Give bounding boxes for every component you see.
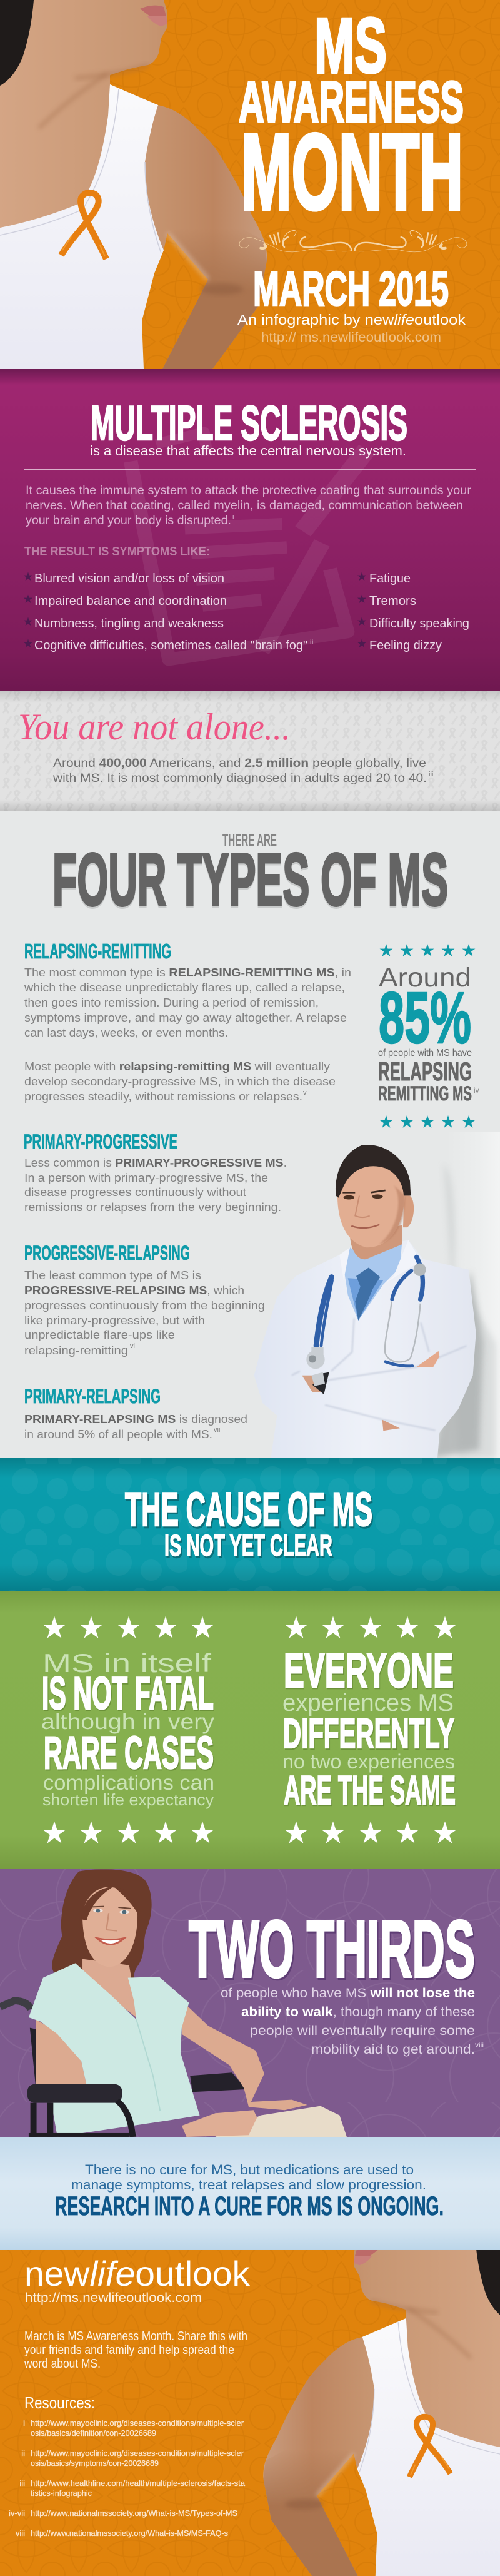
block: relapsing-remitting: develop secondary-progressive MS, in which the disease — [24, 1075, 336, 1088]
intro paragraph: nerves. When that coating, called myelin, is damaged, communication between — [26, 499, 463, 512]
symptoms list: left column: Blurred vision and/or loss of vision — [34, 572, 224, 586]
resources list: tistics-infographic — [31, 2488, 92, 2498]
panel: two thirds — [0, 1869, 500, 2137]
symptoms list: right column: Feeling dizzy — [369, 639, 442, 652]
block: progressive-relapsing: relapsing-remitting — [24, 1344, 128, 1357]
symptoms list: left column: ii — [310, 637, 313, 646]
block: primary-progressive — [24, 1130, 287, 1214]
kicker: there are: THERE ARE — [222, 831, 277, 849]
share message: your friends and family and help spread the — [24, 2343, 234, 2357]
resources list: http://www.nationalmssociety.org/What-is-MS/MS-FAQ-s — [31, 2528, 228, 2538]
block: relapsing-remitting: which the disease unpredictably flares up, called a relapse, — [24, 981, 345, 994]
block: progressive-relapsing: unpredictable flare-ups like — [24, 1328, 175, 1341]
resources list — [9, 2418, 246, 2538]
ornament flourish — [239, 230, 467, 252]
no cure text: There is no cure for MS, but medications are used to — [85, 2162, 414, 2178]
hero background — [0, 0, 500, 369]
statistics text: iii — [429, 771, 433, 778]
two thirds paragraph: mobility aid to get around. — [311, 2042, 475, 2057]
hero url: http:// ms.newlifeoutlook.com — [261, 330, 441, 345]
callout: 85 percent — [378, 944, 479, 1128]
two thirds paragraph: of people who have MS will not lose the — [221, 1986, 475, 2000]
resources list: osis/basics/symptoms/con-20026689 — [31, 2458, 159, 2468]
block: primary-progressive: Less common is PRIMARY-PROGRESSIVE MS . — [24, 1156, 287, 1169]
block: relapsing-remitting: can last days, weeks, or even months. — [24, 1026, 228, 1039]
photo: woman in wheelchair — [0, 1869, 347, 2137]
no cure text — [71, 2162, 426, 2193]
block: progressive-relapsing: The least common type of MS is — [24, 1269, 201, 1282]
intro paragraph: i — [232, 513, 234, 520]
block: relapsing-remitting: symptoms improve, and may go away altogether. A relapse — [24, 1011, 347, 1024]
panel: no cure — [0, 2137, 500, 2250]
share message — [24, 2330, 248, 2371]
callout: 85 percent: Around — [379, 963, 471, 993]
statistics text: Around 400,000 Americans, and 2.5 million people globally, live — [53, 757, 426, 770]
panel: not fatal and different experiences — [0, 1591, 500, 1869]
block: relapsing-remitting: The most common type is RELAPSING-REMITTING MS , in — [24, 966, 351, 979]
left column: is not fatal — [41, 1616, 215, 1843]
block: progressive-relapsing: PROGRESSIVE-RELAPSING MS , which — [24, 1284, 244, 1297]
left column: is not fatal: MS in itself — [42, 1648, 211, 1678]
block: primary-progressive: In a person with primary-progressive MS, the — [24, 1171, 268, 1184]
resources list: http://www.mayoclinic.org/diseases-conditions/multiple-scler — [31, 2418, 244, 2428]
callout: 85 percent: of people with MS have — [378, 1048, 472, 1058]
resources list: http://www.healthline.com/health/multiple-sclerosis/facts-sta — [31, 2478, 246, 2488]
intro paragraph: It causes the immune system to attack the protective coating that surrounds your — [26, 484, 472, 497]
block: relapsing-remitting: RELAPSING-REMITTING — [24, 940, 171, 963]
right column: everyone experiences MS differently: no two experiences — [282, 1750, 455, 1773]
resources list: iii — [19, 2478, 25, 2488]
logo: newlifeoutlook — [24, 2254, 251, 2293]
statistics text — [52, 757, 433, 785]
light blue background — [0, 2137, 500, 2250]
resources list: ii — [21, 2448, 25, 2458]
two thirds paragraph: ability to walk , though many of these — [241, 2005, 475, 2019]
block: progressive-relapsing: progresses continuously from the beginning — [24, 1299, 265, 1312]
left column: is not fatal: RARE CASES — [44, 1728, 214, 1778]
symptoms list: right column — [358, 572, 469, 652]
two thirds paragraph: people will eventually require some — [250, 2024, 475, 2038]
block: relapsing-remitting: v — [303, 1089, 307, 1097]
block: primary-relapsing: vii — [214, 1426, 220, 1434]
left column: is not fatal: complications can — [43, 1771, 214, 1794]
panel: footer — [0, 2241, 500, 2576]
photo: woman with orange ribbon mirrored — [263, 2241, 500, 2576]
block: relapsing-remitting: progresses steadily, without remissions or relapses. — [24, 1090, 302, 1103]
share message: March is MS Awareness Month. Share this with — [24, 2330, 248, 2343]
green background — [0, 1591, 500, 1869]
symptoms list: left column: Impaired balance and coordination — [34, 594, 227, 608]
callout: 85 percent: iv — [474, 1086, 479, 1095]
resources list: http://www.mayoclinic.org/diseases-conditions/multiple-scler — [31, 2448, 244, 2458]
left column: is not fatal: shorten life expectancy — [42, 1790, 214, 1809]
resources list: osis/basics/definition/con-20026689 — [31, 2428, 156, 2438]
symptoms list: left column — [24, 572, 313, 652]
teal background — [0, 1458, 500, 1591]
subheading: is not yet clear: IS NOT YET CLEAR — [164, 1529, 332, 1563]
byline: An infographic by new lifeoutlook — [238, 312, 466, 328]
statistics text: with MS. It is most commonly diagnosed in adults aged 20 to 40. — [52, 772, 427, 785]
resources list: http://www.nationalmssociety.org/What-is-MS/Types-of-MS — [31, 2508, 238, 2518]
panel: the cause of MS — [0, 1458, 500, 1591]
resources list: viii — [16, 2528, 25, 2538]
symptoms list: left column: Numbness, tingling and weakness — [34, 617, 224, 631]
block: progressive-relapsing — [24, 1242, 265, 1357]
purple background — [0, 1869, 500, 2137]
two thirds paragraph — [221, 1986, 484, 2057]
block: primary-relapsing — [24, 1385, 248, 1441]
symptoms list: right column: Tremors — [369, 594, 416, 608]
intro paragraph — [26, 484, 472, 527]
block: primary-progressive: PRIMARY-PROGRESSIVE — [24, 1130, 178, 1153]
share message: word about MS. — [24, 2357, 101, 2371]
watermark: clipboard and pen — [131, 432, 367, 659]
photo: doctor — [254, 1132, 500, 1458]
panel: hero — [0, 0, 500, 369]
panel: four types of MS — [0, 811, 500, 1458]
block: primary-relapsing: PRIMARY-RELAPSING — [24, 1385, 161, 1407]
left column: is not fatal: although in very — [41, 1710, 215, 1734]
subheading: is a disease that affects the central nervous system. — [90, 443, 406, 459]
panel: you are not alone — [0, 691, 500, 811]
block: primary-progressive: remissions or relapses from the very beginning. — [24, 1200, 281, 1214]
block: relapsing-remitting: Most people with relapsing-remitting MS will eventually — [24, 1060, 331, 1073]
block: primary-relapsing: PRIMARY-RELAPSING MS is diagnosed — [24, 1412, 248, 1426]
footer background — [0, 2250, 500, 2576]
photo: woman with orange ribbon — [0, 0, 267, 369]
block: relapsing-remitting: then goes into remission. During a period of remission, — [24, 996, 319, 1009]
right column: everyone experiences MS differently — [282, 1616, 457, 1843]
magenta background — [0, 369, 500, 691]
symptoms label: THE RESULT IS SYMPTOMS LIKE: — [24, 545, 210, 559]
left column: is not fatal: IS NOT FATAL — [42, 1668, 214, 1719]
symptoms list: right column: Fatigue — [369, 572, 411, 586]
script heading: You are not alone... — [18, 706, 291, 748]
light grey background — [0, 811, 500, 1458]
footer url: http://ms.newlifeoutlook.com — [25, 2291, 202, 2305]
ribbon pattern background — [0, 691, 500, 811]
block: relapsing-remitting — [24, 940, 351, 1103]
block: progressive-relapsing: vi — [130, 1342, 135, 1350]
intro paragraph: your brain and your body is disrupted. — [26, 514, 231, 527]
hero title: MS: MS — [314, 3, 387, 89]
symptoms list: right column: Difficulty speaking — [369, 617, 469, 631]
block: progressive-relapsing: like primary-progressive, but with — [24, 1314, 205, 1327]
symptoms list: left column: Cognitive difficulties, sometimes called "brain fog" — [34, 639, 308, 652]
resources list: i — [23, 2418, 25, 2428]
right column: everyone experiences MS differently: experiences MS — [282, 1690, 454, 1716]
block: progressive-relapsing: PROGRESSIVE-RELAPSING — [24, 1242, 190, 1264]
two thirds paragraph: viii — [475, 2041, 484, 2049]
resources list: iv-vii — [9, 2508, 25, 2518]
block: primary-progressive: disease progresses continuously without — [24, 1185, 246, 1199]
panel: multiple sclerosis — [0, 369, 500, 691]
no cure text: manage symptoms, treat relapses and slow progression. — [71, 2177, 426, 2193]
resources heading: Resources: — [24, 2393, 95, 2412]
block: primary-relapsing: in around 5% of all people with MS. — [24, 1427, 212, 1441]
